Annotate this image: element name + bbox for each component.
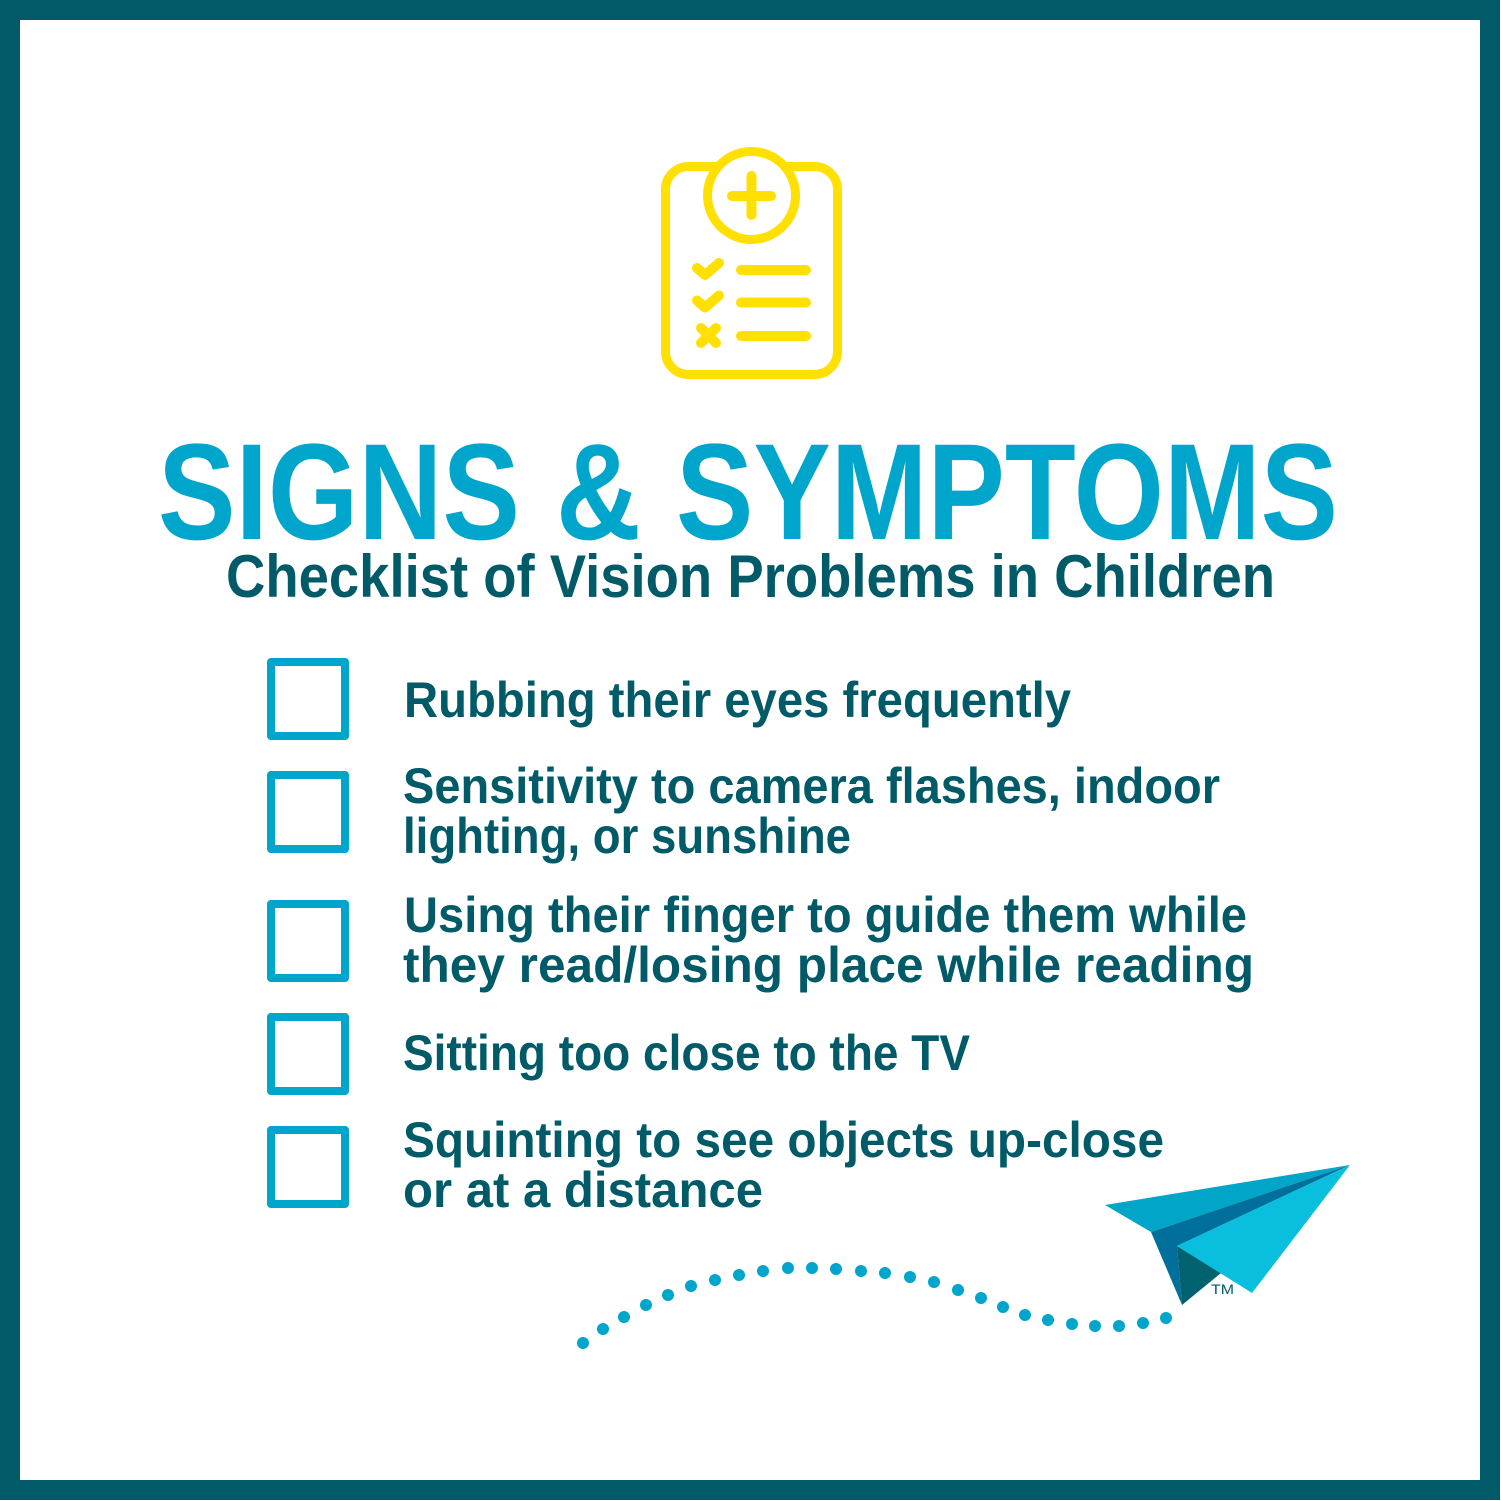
checklist item 5: Squinting to see objects up-close xyxy=(403,1112,1164,1168)
title xyxy=(158,416,1338,569)
checklist item 5 xyxy=(271,1112,1164,1218)
title: SYMPTOMS xyxy=(676,416,1338,569)
checklist item 3 xyxy=(271,887,1254,993)
title: SIGNS xyxy=(158,416,520,569)
checklist item 4 xyxy=(271,1017,971,1091)
icon: medical checklist clipboard xyxy=(666,152,838,374)
icon: paper plane xyxy=(1105,1165,1350,1305)
dotted flight path xyxy=(577,1262,1172,1349)
title: & xyxy=(556,416,641,569)
checklist item 3: Using their finger to guide them while xyxy=(404,887,1247,943)
checklist item 5: or at a distance xyxy=(403,1162,763,1218)
icon: paper plane: TM xyxy=(1211,1281,1234,1297)
checklist item 2 xyxy=(271,758,1220,864)
checklist item 3: they read/losing place while reading xyxy=(403,937,1254,993)
checklist item 2: Sensitivity to camera flashes, indoor xyxy=(403,758,1220,814)
checklist item 1: Rubbing their eyes frequently xyxy=(404,672,1071,728)
checklist item 2: lighting, or sunshine xyxy=(403,808,851,864)
subtitle: Checklist of Vision Problems in Children xyxy=(226,543,1275,610)
checklist item 4: Sitting too close to the TV xyxy=(403,1025,971,1081)
checklist item 1 xyxy=(271,662,1071,736)
